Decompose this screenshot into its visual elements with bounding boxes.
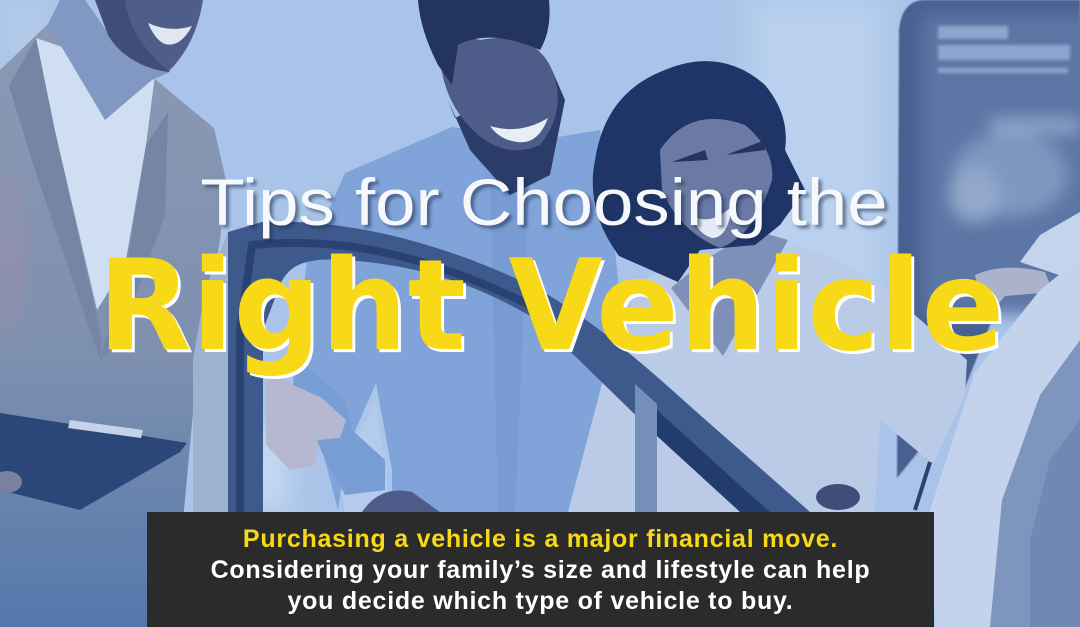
second car at right	[915, 212, 1080, 627]
intro text panel: Purchasing a vehicle is a major financial move.	[243, 525, 838, 553]
clipboard	[0, 413, 187, 510]
intro text panel: Considering your family’s size and lifestyle can help	[211, 556, 870, 584]
man in blue shirt	[266, 0, 620, 512]
intro text panel: you decide which type of vehicle to buy.	[287, 587, 794, 615]
car door and frame	[193, 222, 810, 512]
title line: Tips for Choosing the: Tips for Choosing the	[200, 165, 888, 239]
salesman in grey suit	[0, 0, 226, 627]
woman	[568, 61, 1053, 512]
hand	[266, 368, 346, 470]
title line: Right Vehicle: Right Vehicle	[98, 232, 1004, 379]
intro text panel	[147, 512, 934, 627]
woman's hand on car	[975, 268, 1053, 320]
sign panel at right	[897, 0, 1080, 478]
